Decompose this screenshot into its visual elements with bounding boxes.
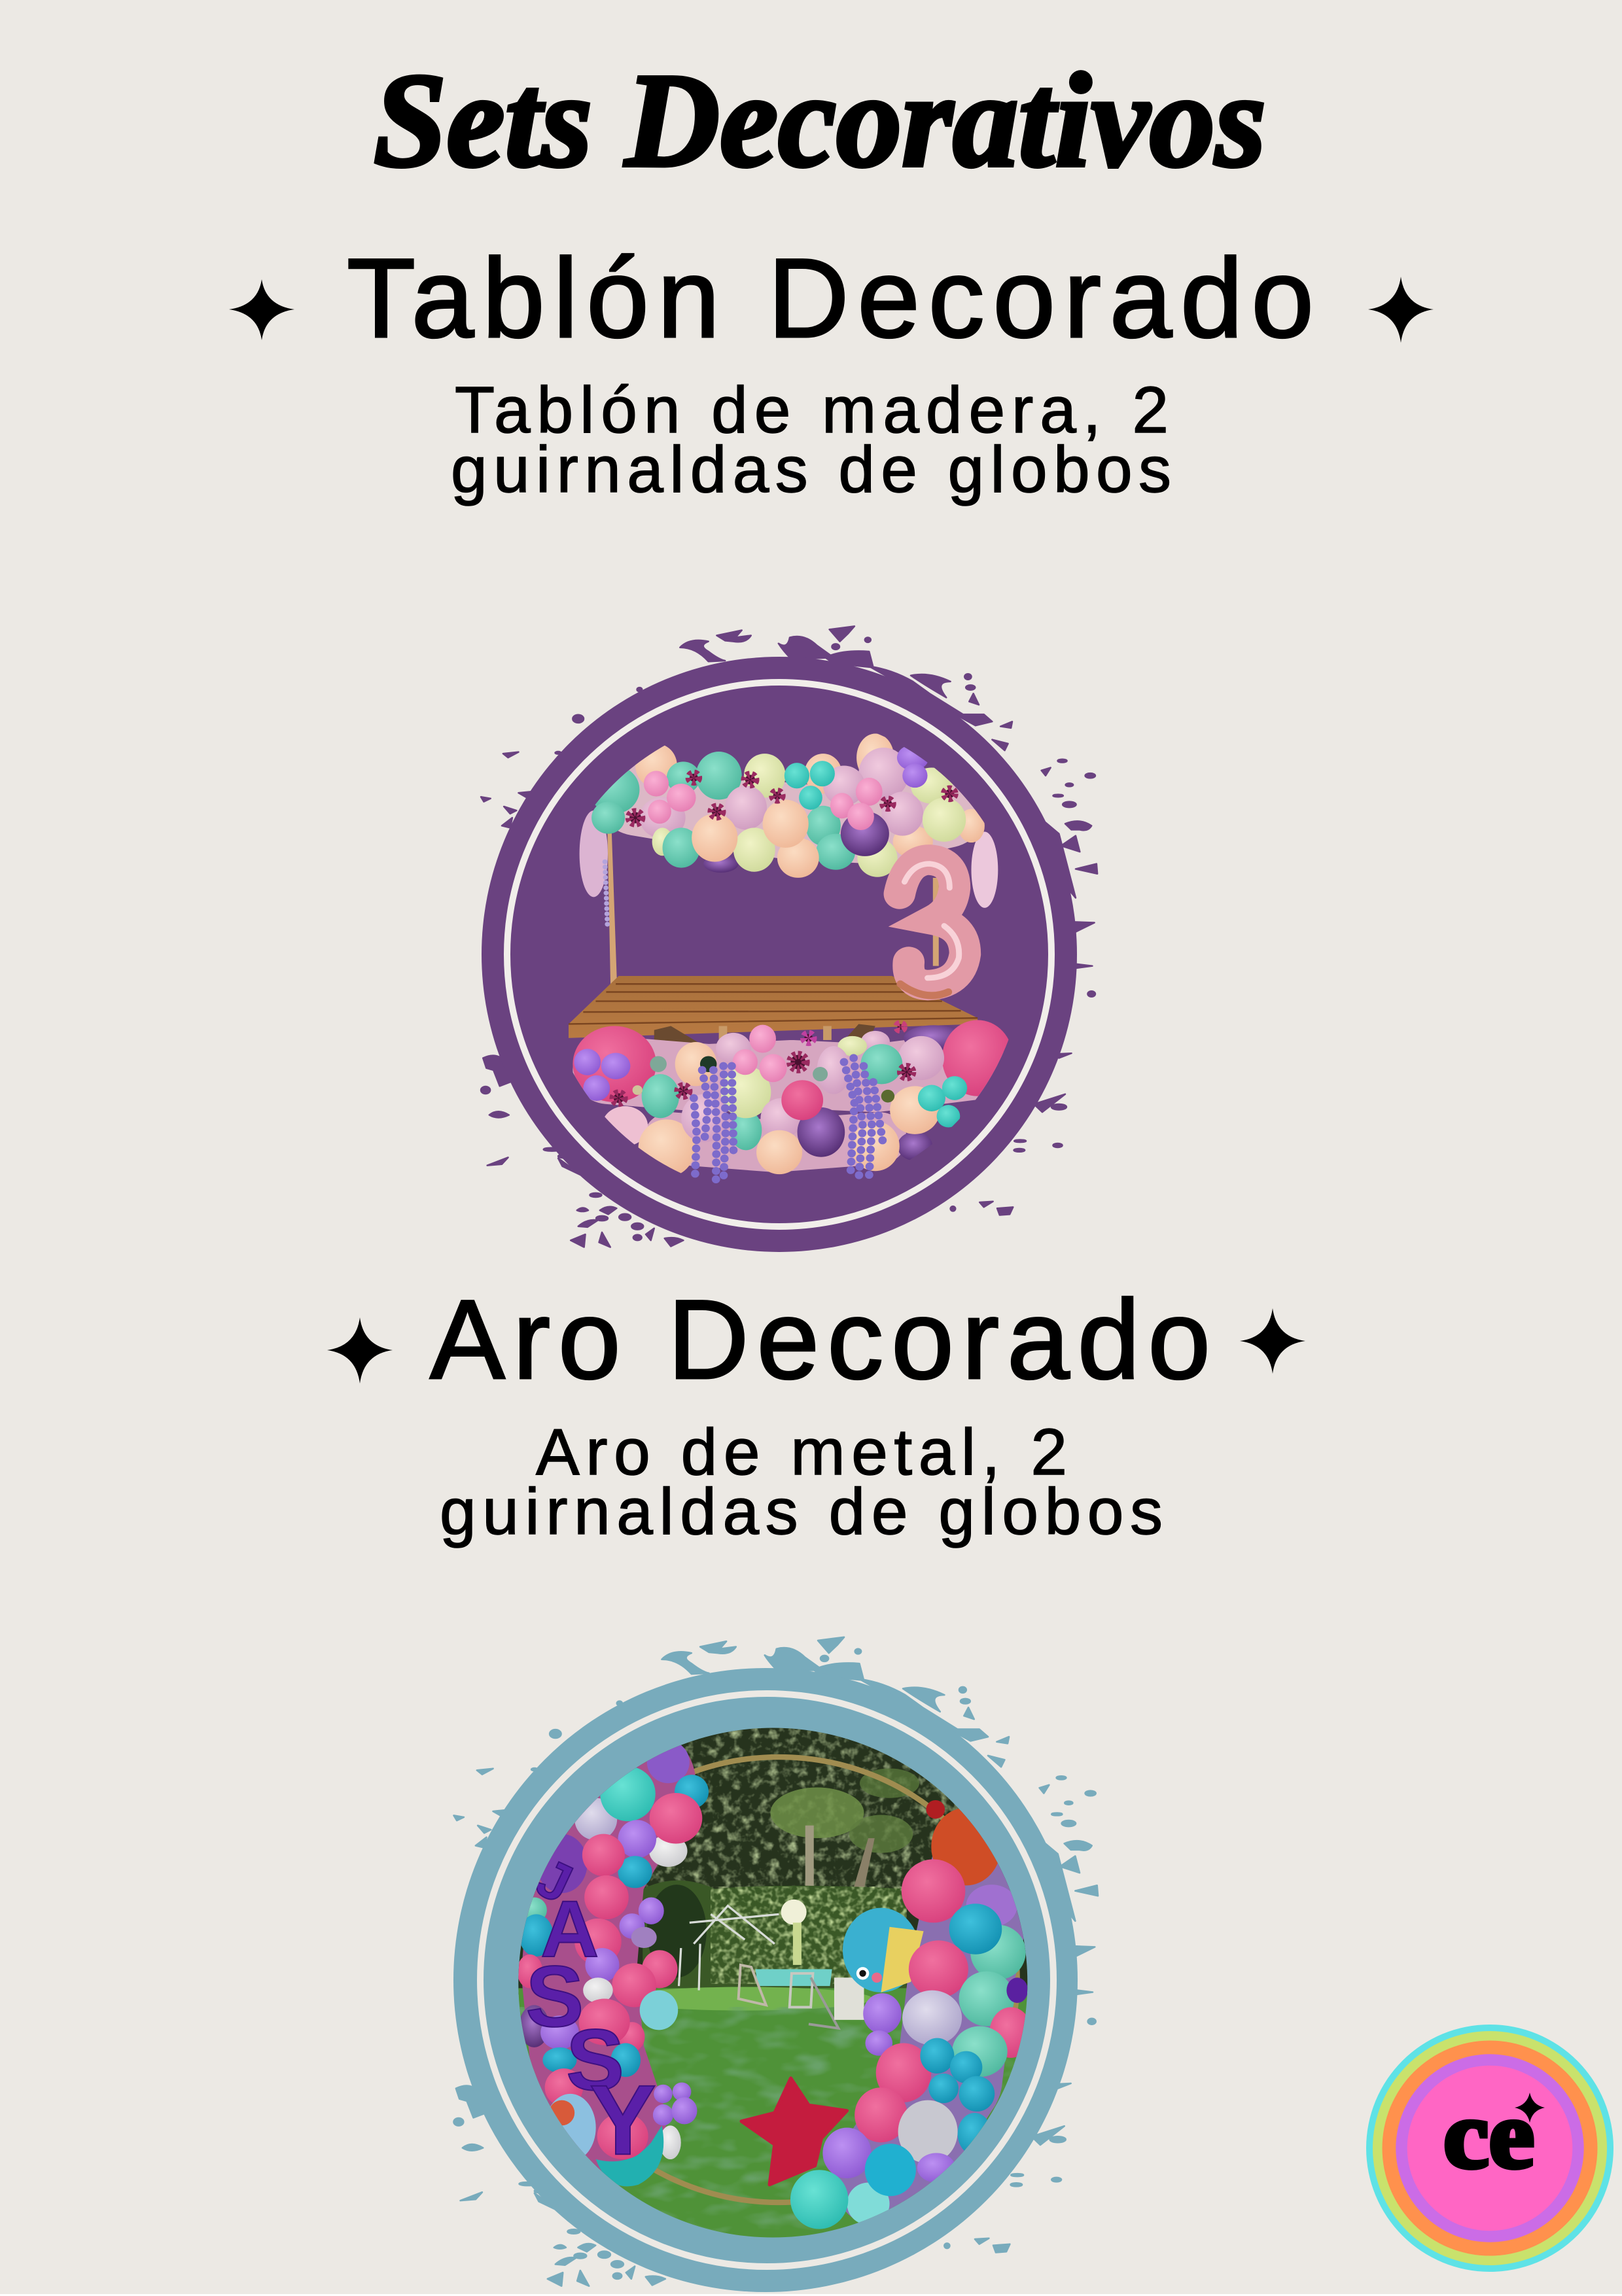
left column backing [579, 1783, 639, 2121]
logo sparkle [1515, 2093, 1545, 2123]
title: Sets Decorativos [374, 45, 1266, 195]
icon: right sparkle [1368, 277, 1434, 343]
foil letters: J [527, 1847, 581, 1915]
foil letters: S [525, 1949, 584, 2045]
logo ring: violet [1396, 2054, 1584, 2242]
badge splatter [481, 626, 1097, 1247]
icon: left sparkle [327, 1317, 393, 1383]
description line 1: Aro de metal, 2 [536, 1416, 1067, 1489]
logo: ce rainbow badge [1366, 2025, 1613, 2272]
description line 2: guirnaldas de globos [440, 1475, 1163, 1548]
left balloon column [517, 1741, 709, 2186]
table posts [607, 829, 939, 996]
badge disc [453, 1668, 1078, 2292]
metal hoop [654, 1754, 1020, 2206]
logo ring: orange [1382, 2041, 1598, 2255]
right column backing [885, 1872, 983, 2176]
foil letters: Y [590, 2065, 656, 2176]
right balloon column [790, 1800, 1032, 2229]
red foil star [741, 2078, 847, 2185]
icon: left sparkle [229, 279, 294, 340]
pale wisteria swags [580, 810, 998, 926]
table legs [654, 1024, 875, 1043]
wooden table top [569, 976, 978, 1038]
badge splatter [454, 1637, 1098, 2286]
badge white ring [480, 1694, 1053, 2267]
upper garland backing [637, 797, 946, 826]
logo disc: pink [1407, 2066, 1572, 2231]
foil letters [525, 1847, 656, 2176]
foil letters: S [566, 2012, 624, 2108]
foil number 3 [900, 860, 965, 996]
section: aro decorado heading [327, 1277, 1305, 1548]
section: tablón decorado heading [229, 235, 1434, 506]
logo ring: cyan [1366, 2025, 1613, 2272]
heading: Aro Decorado: Aro Decorado [430, 1277, 1210, 1402]
icon: right sparkle [1240, 1308, 1305, 1374]
upper garland balloons [590, 733, 985, 878]
description line 1: Tablón de madera, 2 [455, 374, 1169, 447]
heading: Tablón Decorado: Tablón Decorado [347, 235, 1314, 361]
party table and chairs [679, 1900, 864, 2028]
panel: teal badge with decorated hoop [453, 1637, 1098, 2292]
photo: hoop with balloons in garden [515, 1724, 1032, 2244]
lower garland backing [608, 1066, 971, 1146]
description line 2: guirnaldas de globos [451, 433, 1171, 506]
lower garland balloons [573, 1020, 1013, 1182]
garden background [515, 1724, 1030, 2244]
foil letters: A [540, 1885, 599, 1974]
panel: purple badge with decorated table [481, 626, 1097, 1252]
badge disc [482, 657, 1077, 1252]
bottom edge strip [0, 2294, 1622, 2296]
logo ring: lime [1373, 2031, 1607, 2265]
logo letters: ce [1443, 2081, 1534, 2189]
badge white ring [507, 682, 1051, 1226]
photo: table with balloon garlands [569, 733, 1013, 1182]
